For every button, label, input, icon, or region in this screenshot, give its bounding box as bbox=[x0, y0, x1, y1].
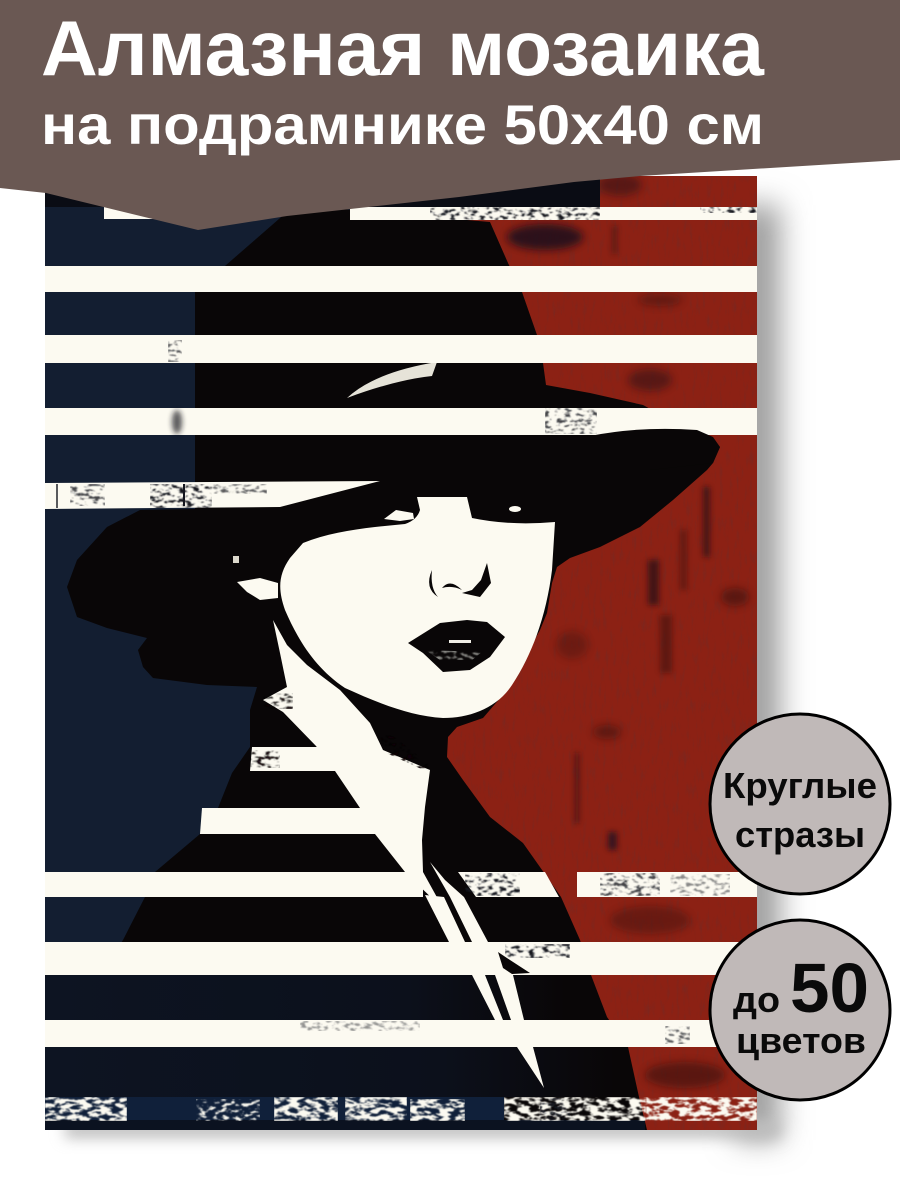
dark blue tint on lower bands bbox=[45, 975, 645, 1130]
neck shadow fuzz bbox=[250, 693, 430, 772]
title: line 2: на подрамнике 50х40 см bbox=[41, 93, 764, 156]
stripe distress marks bbox=[56, 207, 757, 1120]
earring speck bbox=[233, 556, 239, 563]
background red field bbox=[440, 176, 757, 1130]
ear bbox=[237, 578, 278, 600]
badge: up to 50 colours: 50 bbox=[790, 949, 869, 1027]
jacket stripe upper bbox=[250, 747, 336, 771]
scarf ribbons bbox=[425, 862, 544, 1088]
badge: round rhinestones: стразы bbox=[735, 814, 865, 855]
badge: up to 50 colours: до bbox=[733, 979, 780, 1020]
nose bbox=[429, 563, 491, 597]
face bbox=[280, 497, 555, 718]
lips bbox=[408, 620, 505, 672]
badge: up to 50 colours: цветов bbox=[736, 1020, 866, 1061]
badge: round rhinestones: Круглые bbox=[723, 765, 877, 806]
left eye bbox=[384, 510, 414, 521]
brim tip over stripe bbox=[596, 428, 720, 463]
painting: woman in a hat with stripes bbox=[45, 174, 757, 1130]
figure: hat, hair and jacket silhouette bbox=[45, 205, 720, 1130]
title: line 1: Алмазная мозаика bbox=[41, 4, 765, 92]
bottom torn stripe bbox=[45, 1097, 757, 1121]
right eye bbox=[509, 506, 521, 512]
badge: up to 50 colours bbox=[710, 920, 890, 1100]
left navy hat-side shade bbox=[45, 219, 195, 266]
canvas drop shadow bbox=[65, 205, 780, 1140]
jacket stripe lower bbox=[200, 808, 376, 834]
red mottling texture bbox=[440, 174, 757, 1130]
white horizontal stripes bbox=[45, 205, 757, 1047]
badge: round rhinestones bbox=[710, 714, 890, 894]
neck bbox=[263, 620, 444, 910]
hat highlight bbox=[347, 362, 437, 398]
background navy bbox=[45, 207, 350, 942]
navy upper band dark bbox=[45, 180, 600, 207]
header banner bbox=[0, 0, 900, 230]
